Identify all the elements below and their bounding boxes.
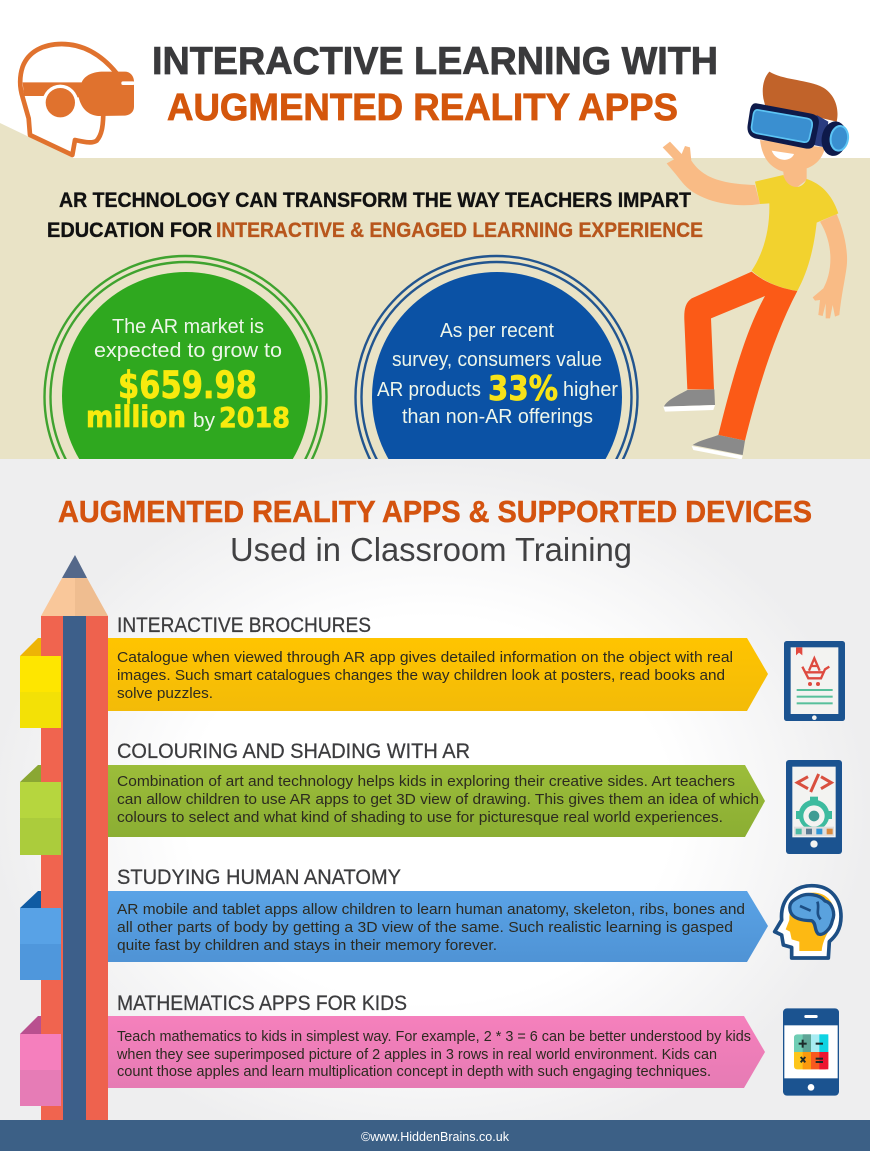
panel: market growth circle: expected to grow to: [94, 339, 282, 362]
section heading: [58, 494, 812, 568]
panel: human anatomy: [108, 866, 768, 962]
panel: interactive brochures: images. Such smart catalogues changes the way children look at posters, read books and: [117, 667, 725, 684]
panel: market growth circle: The AR market is: [112, 315, 264, 338]
panel: human anatomy: STUDYING HUMAN ANATOMY: [117, 866, 401, 889]
panel: interactive brochures: INTERACTIVE BROCHURES: [117, 614, 371, 637]
footer bar: [0, 1120, 870, 1151]
panel: survey circle: survey, consumers value: [392, 348, 602, 371]
icon: tablet with shopping basket: [784, 641, 845, 721]
panel: survey circle: AR products: [377, 378, 481, 401]
panel: market growth circle: 2018: [219, 401, 290, 434]
panel: survey circle: As per recent: [440, 319, 554, 342]
title: AUGMENTED REALITY APPS: [167, 87, 678, 129]
panel: survey circle: higher: [563, 378, 618, 401]
panel: mathematics apps: [108, 992, 765, 1088]
character: boy wearing VR headset: [663, 72, 850, 459]
panel: market growth circle: by: [193, 409, 216, 432]
title: INTERACTIVE LEARNING WITH: [152, 40, 718, 83]
ribbon fold backs: [20, 638, 41, 1034]
subtitle: EDUCATION FOR: [47, 219, 212, 242]
panel: survey circle: 33%: [488, 369, 558, 409]
panel: market growth circle: $659.98: [118, 364, 257, 407]
title: [152, 40, 718, 129]
panel: interactive brochures: Catalogue when viewed through AR app gives detailed information on the object with real: [117, 649, 733, 666]
ribbon tab: blue: [20, 908, 61, 980]
panel: mathematics apps: Teach mathematics to kids in simplest way. For example, 2 * 3 = 6 can be better understood by kids: [117, 1028, 751, 1045]
panel: colouring and shading: colours to select and what kind of shading to use for picturesque real world experiences.: [117, 809, 723, 826]
panel: human anatomy: AR mobile and tablet apps allow children to learn human anatomy, skeleton, ribs, bones and: [117, 901, 745, 918]
pencil: [41, 555, 108, 1120]
ribbon tab: pink: [20, 1034, 61, 1106]
panel: colouring and shading: COLOURING AND SHADING WITH AR: [117, 740, 470, 763]
panel: survey circle: than non-AR offerings: [402, 405, 593, 428]
footer bar: ©www.HiddenBrains.co.uk: [361, 1130, 510, 1144]
icon: phone with code and gear: [786, 760, 842, 854]
beige hero background: [0, 123, 870, 460]
panel: human anatomy: all other parts of body by getting a 3D view of the same. Such realistic learning is gasped: [117, 919, 733, 936]
panel: colouring and shading: can allow children to use AR apps to get 3D view of drawing. This gives them an idea of which: [117, 791, 759, 808]
panel: colouring and shading: Combination of art and technology helps kids in exploring their creative sides. Art teachers: [117, 773, 735, 790]
ribbon tab: yellow: [20, 656, 61, 728]
section heading: AUGMENTED REALITY APPS & SUPPORTED DEVICES: [58, 494, 812, 529]
panel: interactive brochures: solve puzzles.: [117, 685, 213, 702]
ribbon tab: green: [20, 782, 61, 855]
panel: human anatomy: quite fast by children and stays in their memory forever.: [117, 937, 497, 954]
panel: interactive brochures: [108, 614, 768, 711]
panel: mathematics apps: when they see superimposed picture of 2 apples in 3 rows in real world environment. Kids can: [116, 1046, 717, 1063]
subtitle: INTERACTIVE & ENGAGED LEARNING EXPERIENCE: [216, 219, 703, 242]
panel: market growth circle: million: [86, 400, 186, 434]
icon: phone with calculator: [783, 1008, 839, 1096]
panel: colouring and shading: [108, 740, 765, 837]
icon: head with brain: [775, 886, 841, 958]
section heading: Used in Classroom Training: [230, 531, 632, 568]
lower section background: [0, 459, 870, 1121]
panel: mathematics apps: MATHEMATICS APPS FOR KIDS: [117, 992, 407, 1015]
icon: VR headset head: [20, 44, 135, 155]
subtitle: AR TECHNOLOGY CAN TRANSFORM THE WAY TEACHERS IMPART: [59, 189, 691, 212]
top white background: [0, 0, 870, 460]
panel: mathematics apps: count those apples and learn multiplication concept in depth with such engaging techniques.: [117, 1063, 711, 1080]
subtitle: [47, 189, 703, 242]
panel: market growth circle: [44, 256, 326, 538]
panel: survey circle: [356, 256, 638, 538]
